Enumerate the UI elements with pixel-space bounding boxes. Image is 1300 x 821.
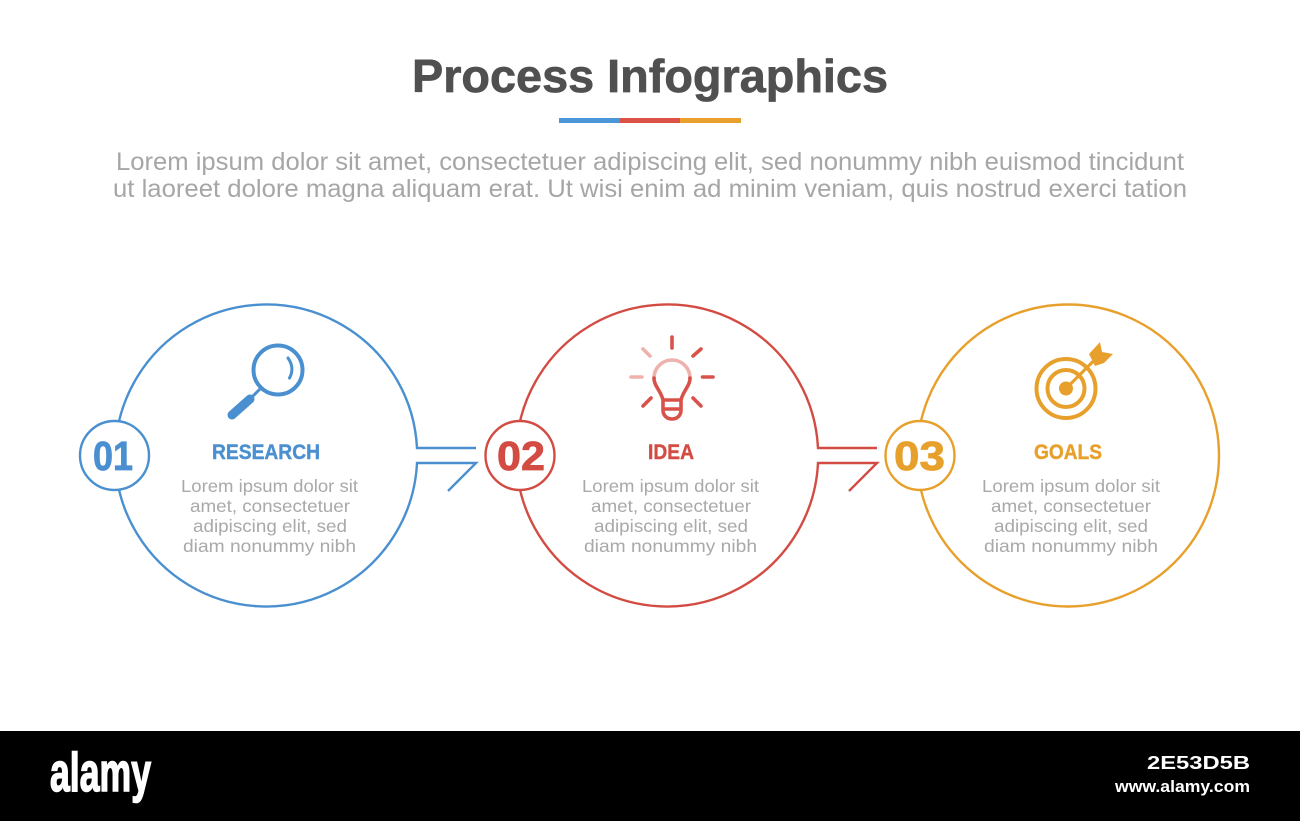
number badge 01: 01 <box>93 433 133 479</box>
description: amet, consectetuer <box>190 496 350 516</box>
footer logo: alamy <box>50 741 151 803</box>
footer url: www.alamy.com <box>1114 777 1250 796</box>
description: diam nonummy nibh <box>584 536 757 556</box>
description <box>582 476 759 556</box>
description: diam nonummy nibh <box>183 536 356 556</box>
intro text: Lorem ipsum dolor sit amet, consectetuer adipiscing elit, sed nonummy nibh euismod tincidunt <box>116 148 1184 176</box>
description: diam nonummy nibh <box>984 536 1158 556</box>
title underline <box>559 118 741 123</box>
footer bar <box>0 731 1300 821</box>
panel: step 3 goals <box>886 304 1219 606</box>
icon: target with arrow <box>1036 342 1113 418</box>
number badge 03 <box>886 421 954 490</box>
ring <box>917 304 1219 606</box>
description: adipiscing elit, sed <box>994 516 1148 536</box>
icon: light bulb <box>631 337 713 419</box>
description: Lorem ipsum dolor sit <box>582 476 759 496</box>
icon: magnifying glass <box>232 346 302 415</box>
description: amet, consectetuer <box>591 496 751 516</box>
number badge 02 <box>486 421 554 490</box>
heading: idea: IDEA <box>648 441 694 464</box>
heading: research: RESEARCH <box>212 441 320 464</box>
description <box>181 476 358 556</box>
intro text: ut laoreet dolore magna aliquam erat. Ut wisi enim ad minim veniam, quis nostrud exerci tation <box>113 175 1187 203</box>
image id: 2E53D5B <box>1147 753 1250 773</box>
intro text <box>113 148 1187 203</box>
heading: goals: GOALS <box>1034 441 1102 464</box>
description: Lorem ipsum dolor sit <box>982 476 1160 496</box>
description <box>982 476 1160 556</box>
description: adipiscing elit, sed <box>594 516 748 536</box>
title: Process Infographics <box>412 50 888 102</box>
ring with arrow <box>516 304 877 606</box>
number badge 01 <box>80 421 149 490</box>
description: Lorem ipsum dolor sit <box>181 476 358 496</box>
number badge 02: 02 <box>497 433 545 479</box>
panel: step 2 idea <box>486 304 877 606</box>
panel: step 1 research <box>80 304 476 606</box>
description: amet, consectetuer <box>991 496 1151 516</box>
description: adipiscing elit, sed <box>193 516 347 536</box>
ring with arrow <box>115 304 476 606</box>
number badge 03: 03 <box>894 433 945 479</box>
